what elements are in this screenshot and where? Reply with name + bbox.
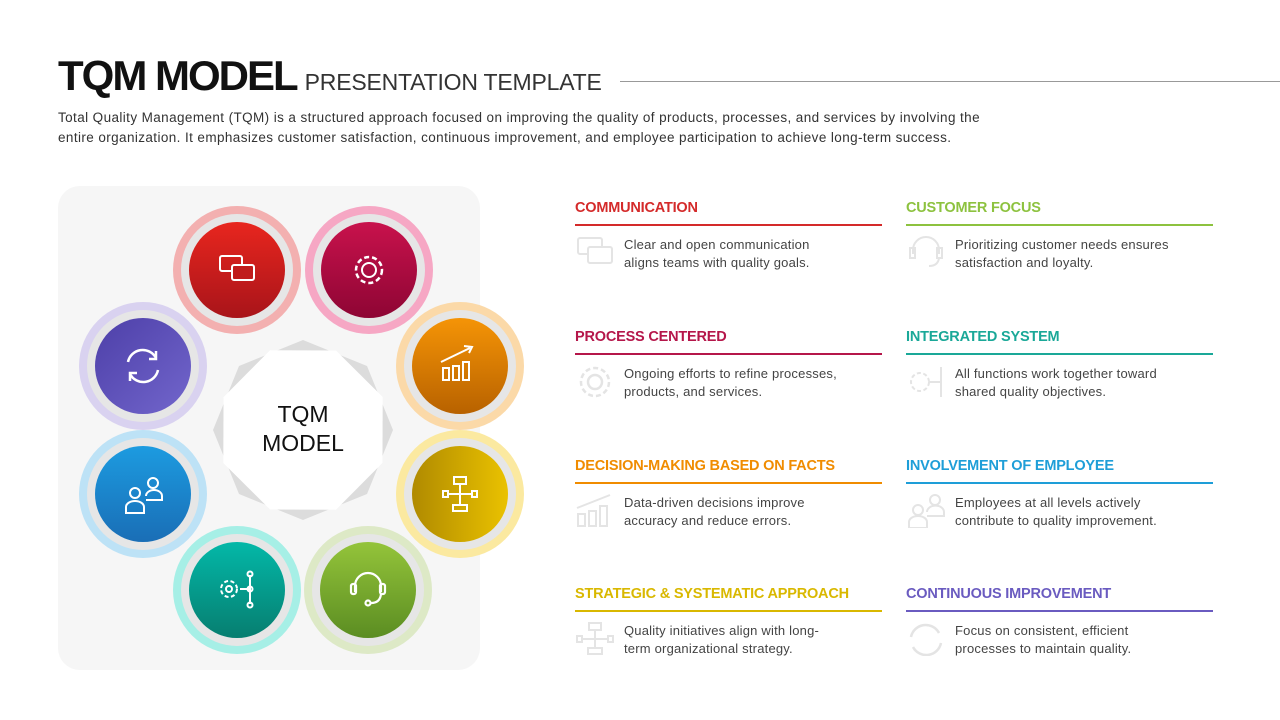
item: involvement of employee: contribute to quality improvement.: [955, 513, 1157, 528]
item: communication: aligns teams with quality goals.: [624, 255, 810, 270]
node: process centered: [305, 206, 433, 334]
item: process centered: Ongoing efforts to refine processes,: [624, 366, 837, 381]
item: communication: [575, 200, 882, 270]
item: decision-making: accuracy and reduce errors.: [624, 513, 791, 528]
node: involvement of employee: [79, 430, 207, 558]
node: decision-making: [396, 302, 524, 430]
node: continuous improvement: [79, 302, 207, 430]
item: customer focus: satisfaction and loyalty.: [955, 255, 1093, 270]
item: process centered: products, and services.: [624, 384, 762, 399]
item: integrated system: shared quality objectives.: [955, 384, 1106, 399]
item: process centered: [575, 329, 882, 399]
item: strategic approach: term organizational strategy.: [624, 641, 793, 656]
item: process centered: PROCESS CENTERED: [575, 329, 726, 345]
item: decision-making: Data-driven decisions improve: [624, 495, 805, 510]
node: strategic: [396, 430, 524, 558]
item: involvement of employee: Employees at all levels actively: [955, 495, 1141, 510]
item: integrated system: All functions work together toward: [955, 366, 1157, 381]
item: communication: COMMUNICATION: [575, 200, 698, 216]
item: continuous improvement: Focus on consistent, efficient: [955, 623, 1128, 638]
title: TQM MODEL PRESENTATION TEMPLATE: [58, 52, 602, 99]
node: communication: [173, 206, 301, 334]
item: strategic approach: [575, 586, 882, 656]
item: customer focus: Prioritizing customer needs ensures: [955, 237, 1169, 252]
intro text: Total Quality Management (TQM) is a structured approach focused on improving the quality of products, processes, and services by involving the entire organization. It emphasizes customer satisfaction, continuous improvement, and employee participation to achieve long-term success.: [58, 110, 980, 145]
item: involvement of employee: [906, 458, 1213, 528]
item: strategic approach: STRATEGIC & SYSTEMATIC APPROACH: [575, 586, 849, 602]
item: communication: Clear and open communication: [624, 237, 810, 252]
item: involvement of employee: INVOLVEMENT OF EMPLOYEE: [906, 458, 1114, 474]
item: strategic approach: Quality initiatives align with long-: [624, 623, 819, 638]
item: integrated system: INTEGRATED SYSTEM: [906, 329, 1059, 345]
item: customer focus: [906, 200, 1213, 270]
item: integrated system: [906, 329, 1213, 399]
center octagon: [191, 318, 415, 542]
center octagon: TQM: [277, 401, 329, 427]
node: integrated system: [173, 526, 301, 654]
item: continuous improvement: CONTINUOUS IMPROVEMENT: [906, 586, 1111, 602]
node: customer focus: [304, 526, 432, 654]
item: continuous improvement: processes to maintain quality.: [955, 641, 1131, 656]
item: customer focus: CUSTOMER FOCUS: [906, 200, 1041, 216]
center octagon: MODEL: [262, 430, 344, 456]
panel: diagram: [58, 186, 480, 670]
item: continuous improvement: [906, 586, 1213, 656]
item: decision-making: [575, 458, 882, 528]
item: decision-making: DECISION-MAKING BASED ON FACTS: [575, 458, 835, 474]
